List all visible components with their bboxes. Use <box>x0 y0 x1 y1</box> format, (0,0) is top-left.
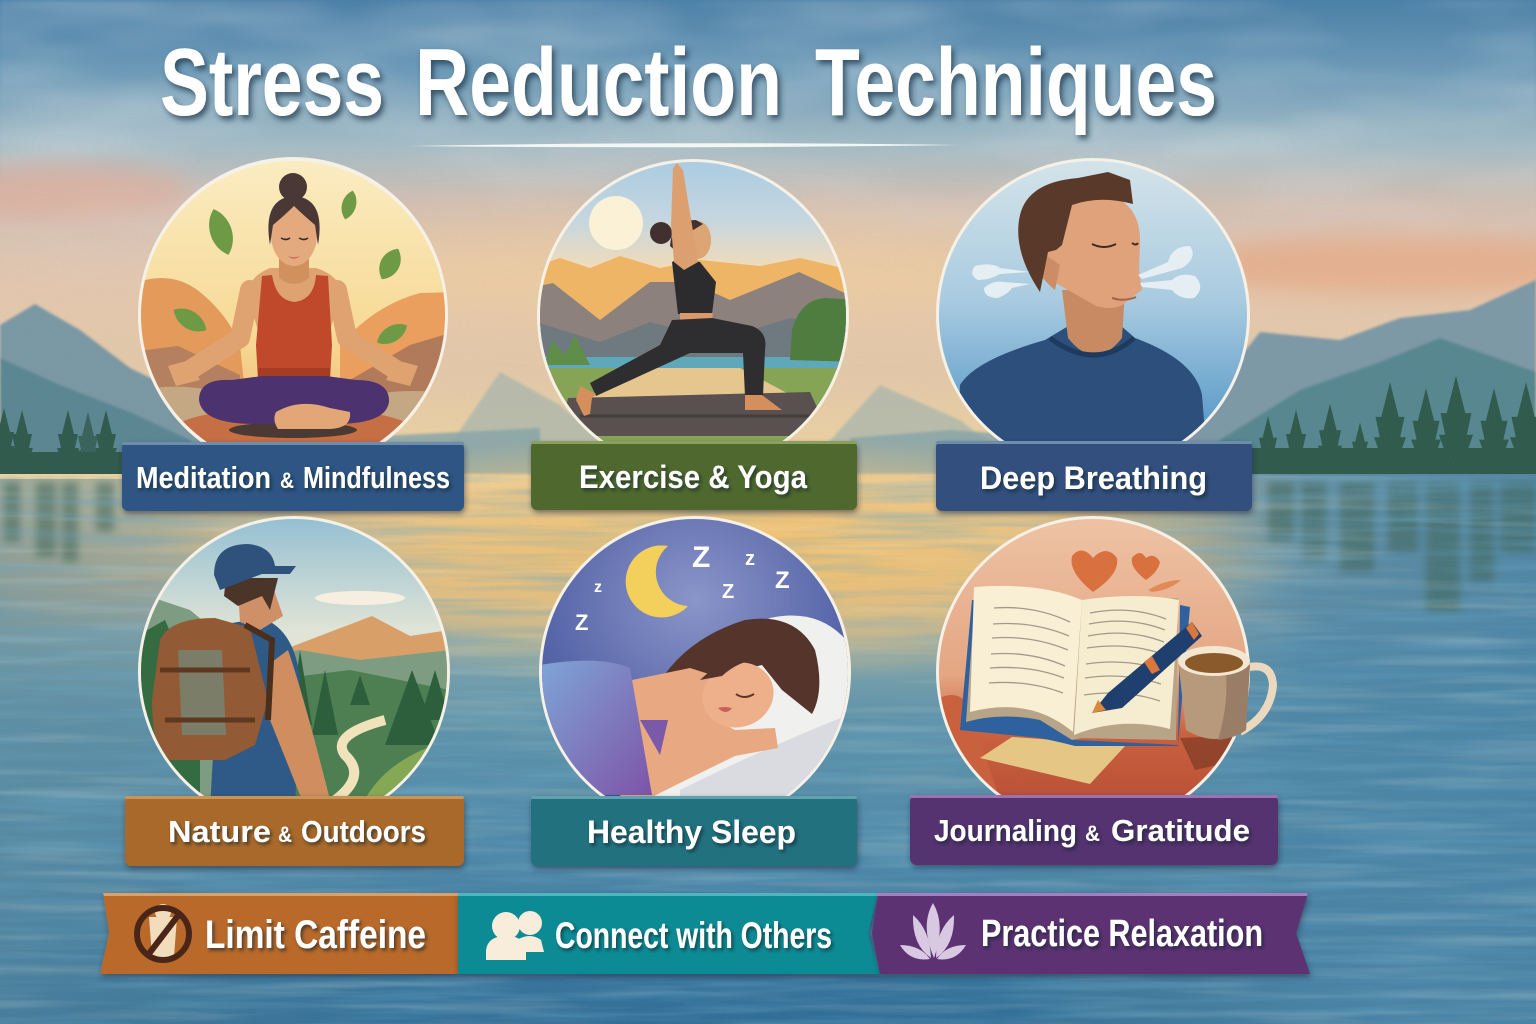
illustration: sleeping woman: z <box>594 579 602 596</box>
woman <box>168 173 418 429</box>
icon: people <box>486 911 544 960</box>
ribbon: Practice Relaxation: Practice Relaxation <box>981 913 1263 955</box>
panel: journaling & gratitude <box>910 510 1278 865</box>
man with backpack <box>210 618 300 810</box>
illustration: sleeping woman: z <box>745 548 755 570</box>
label: Journaling & Gratitude: & <box>1085 821 1100 846</box>
label: Journaling & Gratitude: Gratitude <box>1111 813 1250 848</box>
ribbon: Limit Caffeine <box>100 893 458 974</box>
label: Deep Breathing: Deep Breathing <box>980 460 1207 496</box>
label: Deep Breathing <box>936 441 1252 511</box>
title underline <box>408 143 958 147</box>
illustration: man breathing <box>936 158 1250 441</box>
label: Exercise & Yoga: Exercise & Yoga <box>579 459 807 495</box>
label: Meditation & Mindfulness: Meditation <box>136 460 271 495</box>
coffee mug <box>1178 646 1273 740</box>
illustration: meditating woman <box>138 157 448 442</box>
label: Nature & Outdoors: Outdoors <box>301 814 426 849</box>
illustration: sleeping woman: Z <box>722 581 734 603</box>
panel: exercise & yoga <box>530 155 860 510</box>
panel: nature & outdoors <box>125 510 464 866</box>
illustration: hiker <box>138 516 450 796</box>
panel: meditation & mindfulness <box>122 150 464 511</box>
leaves <box>169 189 411 349</box>
lake water <box>0 435 1536 1024</box>
illustration: sleeping woman: Z <box>775 567 790 594</box>
label: Exercise & Yoga <box>531 441 857 510</box>
title: Reduction <box>415 29 782 136</box>
breath puffs <box>972 246 1200 298</box>
tree line <box>0 376 1536 474</box>
open book <box>960 600 1190 746</box>
label: Journaling & Gratitude: Journaling <box>934 813 1077 848</box>
icon: lotus <box>900 903 966 959</box>
illustration: sleeping woman <box>539 516 851 796</box>
woman in warrior pose <box>576 163 782 416</box>
illustration: sleeping woman: Z <box>692 541 710 574</box>
pen <box>1092 622 1202 713</box>
illustration: sleeping woman: Z <box>575 610 588 635</box>
ribbon: Connect with Others: Connect with Others <box>555 915 832 956</box>
label: Healthy Sleep: Healthy Sleep <box>587 814 796 850</box>
note paper <box>980 737 1126 784</box>
label: Meditation & Mindfulness <box>122 442 464 511</box>
panel: deep breathing <box>930 150 1260 511</box>
illustration: journal, pen and mug <box>936 516 1277 795</box>
label: Nature & Outdoors: Nature <box>168 814 271 849</box>
ribbon: Limit Caffeine: Limit Caffeine <box>205 913 426 957</box>
label: Meditation & Mindfulness: Mindfulness <box>303 460 450 495</box>
hearts <box>1071 550 1117 592</box>
distant mountains <box>0 280 1536 474</box>
bottom ribbon <box>100 893 1310 974</box>
ribbon: Practice Relaxation <box>872 893 1310 974</box>
label: Healthy Sleep <box>531 796 857 866</box>
label: Meditation & Mindfulness: & <box>280 468 294 493</box>
icon: no caffeine <box>137 904 189 960</box>
label: Nature & Outdoors <box>125 796 464 866</box>
ribbon: Connect with Others <box>458 893 880 974</box>
label: Journaling & Gratitude <box>910 795 1278 865</box>
title: Techniques <box>815 29 1217 136</box>
title: Stress <box>160 29 384 136</box>
panel: healthy sleep <box>530 510 860 866</box>
illustration: yoga pose <box>537 159 849 441</box>
label: Nature & Outdoors: & <box>278 822 292 847</box>
